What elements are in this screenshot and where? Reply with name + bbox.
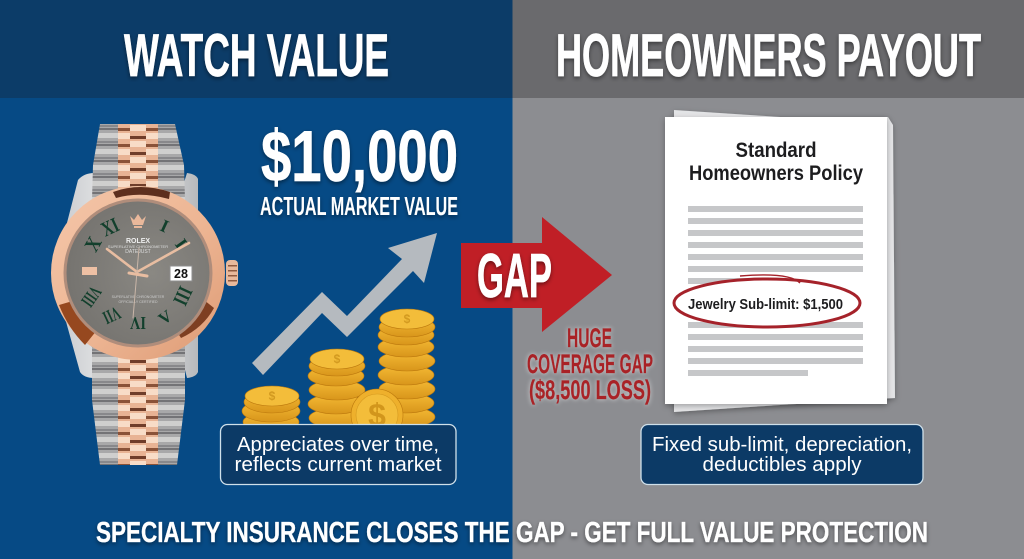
coin stack tall: $ xyxy=(404,312,411,326)
roman numerals: X xyxy=(79,232,107,256)
callout: fixed sub-limit: Fixed sub-limit, depreciation, xyxy=(652,434,912,456)
heading: watch value: WATCH VALUE xyxy=(124,22,389,89)
dial face xyxy=(66,202,210,344)
callout: huge coverage gap xyxy=(527,323,653,405)
header band: watch value xyxy=(0,0,512,98)
roman numerals: IV xyxy=(130,313,146,333)
watch hands xyxy=(107,243,189,318)
watch bezel xyxy=(51,186,225,360)
jewelry sub-limit, circled xyxy=(674,275,860,327)
coin stack tall xyxy=(378,309,435,427)
coin stack small xyxy=(242,386,300,432)
label: actual market value: ACTUAL MARKET VALUE xyxy=(260,191,458,221)
large front coin: $ xyxy=(368,397,386,433)
panel: watch value background xyxy=(0,0,512,559)
date window: 28 xyxy=(174,267,188,281)
arrow: gap xyxy=(461,217,612,332)
roman numerals: I xyxy=(171,235,191,252)
callout: appreciates over time: reflects current market xyxy=(234,454,442,476)
date window xyxy=(170,266,192,281)
jewelry sub-limit, circled: Jewelry Sub-limit: $1,500 xyxy=(688,296,843,313)
header band: homeowners payout xyxy=(512,0,1024,98)
coin stack medium xyxy=(308,349,365,428)
document title: Standard xyxy=(736,139,816,162)
icon: luxury watch xyxy=(51,124,238,465)
text placeholder lines xyxy=(688,206,863,376)
dial face: SUPERLATIVE CHRONOMETER xyxy=(112,295,165,299)
document title: Homeowners Policy xyxy=(689,162,863,185)
roman numerals: III xyxy=(168,283,198,309)
panel: homeowners payout background xyxy=(512,0,1024,559)
callout: huge coverage gap: HUGE xyxy=(567,323,612,353)
roman numerals xyxy=(76,213,198,333)
big value: $10,000: $10,000 xyxy=(261,117,458,197)
roman numerals: V xyxy=(155,306,176,329)
crown logo xyxy=(130,214,146,228)
coin stack small: $ xyxy=(269,389,276,403)
dial face: OFFICIALLY CERTIFIED xyxy=(118,300,158,304)
back sheets xyxy=(674,110,895,412)
roman numerals: I xyxy=(157,215,172,236)
9 o'clock marker xyxy=(82,267,97,275)
large front coin xyxy=(351,389,403,441)
watch crown xyxy=(226,260,238,286)
document title xyxy=(689,139,863,185)
roman numerals: XI xyxy=(97,213,123,241)
callout: appreciates over time: Appreciates over time, xyxy=(237,434,439,456)
dial text: ROLEX xyxy=(126,238,150,245)
coin stack medium: $ xyxy=(334,352,341,366)
roman numerals: VII xyxy=(99,302,124,328)
dial face: DATEJUST xyxy=(125,249,151,255)
callout: fixed sub-limit xyxy=(641,424,923,484)
roman numerals: VIII xyxy=(76,282,105,310)
document: standard homeowners policy xyxy=(665,110,895,412)
watch case lugs xyxy=(60,173,198,378)
watch bracelet xyxy=(92,124,185,465)
arrow: gap: GAP xyxy=(477,242,552,311)
icon: rising trend arrow xyxy=(252,233,437,375)
dial face: SUPERLATIVE CHRONOMETER xyxy=(108,244,168,249)
callout: appreciates over time xyxy=(220,424,456,484)
icon: coin stacks xyxy=(242,309,435,441)
callout: huge coverage gap: ($8,500 LOSS) xyxy=(529,375,651,405)
callout: fixed sub-limit: deductibles apply xyxy=(702,454,862,476)
front page xyxy=(665,117,887,404)
watch dial xyxy=(64,198,212,348)
callout: huge coverage gap: COVERAGE GAP xyxy=(527,349,653,379)
